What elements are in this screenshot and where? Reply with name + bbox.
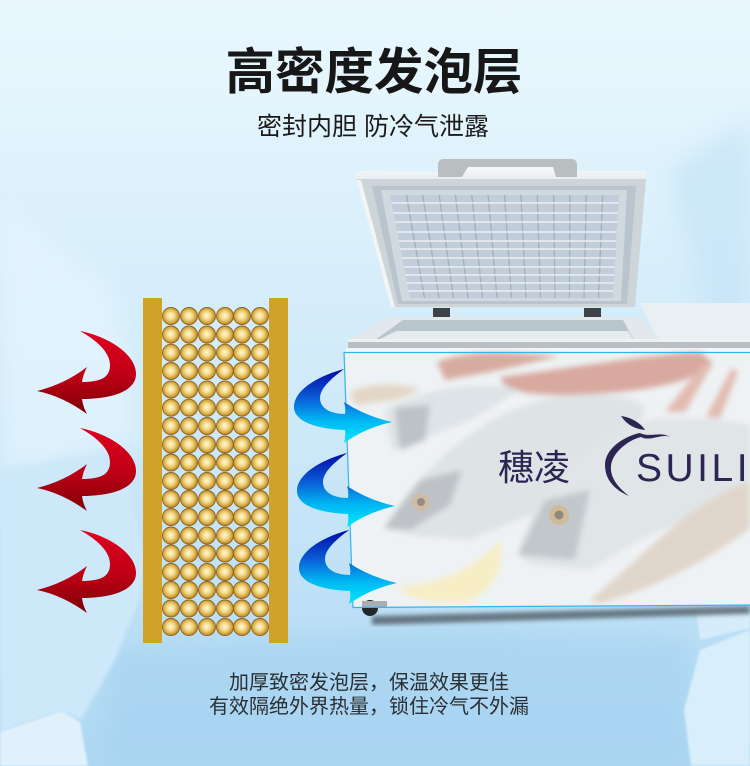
front panel outline — [344, 352, 750, 608]
freezer open lid — [356, 159, 646, 307]
description line 1: 加厚致密发泡层，保温效果更佳 — [229, 672, 509, 694]
logo text chinese: 穗凌 — [498, 447, 570, 488]
logo mark — [605, 416, 670, 496]
title: 高密度发泡层 — [226, 45, 522, 100]
gold wall left — [143, 298, 162, 643]
subtitle: 密封内胆 防冷气泄露 — [257, 113, 489, 141]
freezer body rim and control box — [346, 303, 750, 353]
foam balls — [162, 308, 268, 636]
red arrows — [37, 331, 136, 613]
logo text latin: SUILI — [636, 447, 750, 490]
description line 2: 有效隔绝外界热量，锁住冷气不外漏 — [209, 696, 529, 718]
blue arrows — [294, 369, 397, 604]
freezer shadow — [372, 606, 750, 625]
freezer front panel with seafood photo — [345, 352, 750, 607]
gold wall right — [269, 298, 288, 643]
freezer hinges — [433, 308, 601, 317]
freezer caster wheel — [362, 600, 387, 616]
